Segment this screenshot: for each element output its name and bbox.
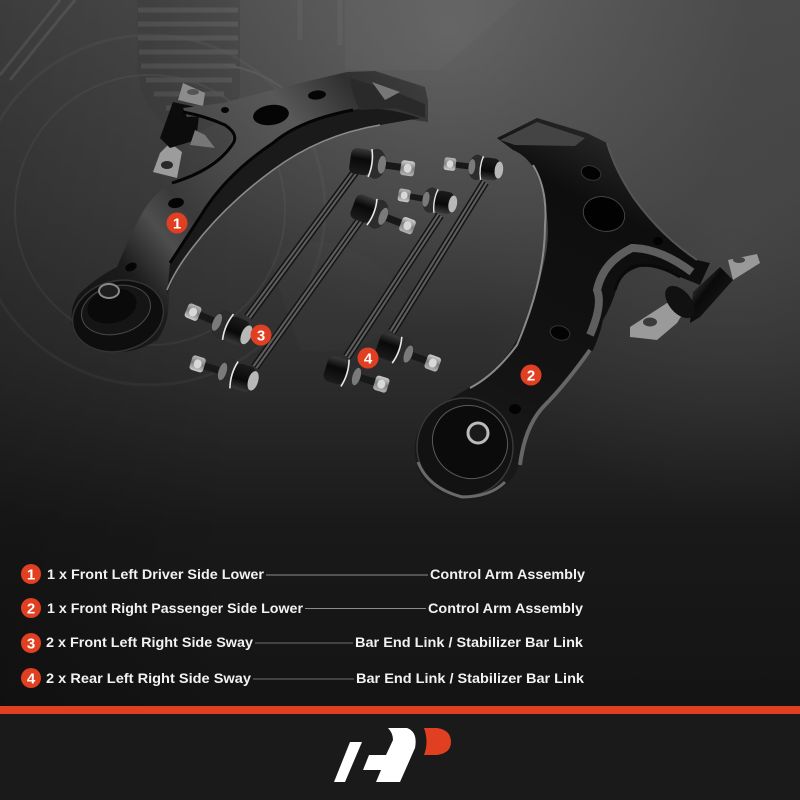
callout badge 1: [166, 212, 188, 234]
legend row 3: [21, 633, 583, 653]
legend: [21, 564, 585, 688]
callout badge 2: [520, 364, 542, 386]
callout badge 3: [250, 324, 272, 346]
legend row 4: [21, 668, 584, 688]
footer: [0, 706, 800, 800]
callout badge 1: 1: [173, 216, 181, 232]
sway bar end link 4a: [321, 182, 459, 401]
legend row 1: Control Arm Assembly: [430, 566, 585, 582]
bushing: arm 2 sleeve: [630, 254, 760, 340]
callout badge 3: 3: [257, 328, 265, 344]
legend row 4: 4: [27, 670, 36, 688]
red divider bar: [0, 706, 800, 714]
bushing bracket: [153, 83, 215, 178]
legend row 2: Control Arm Assembly: [428, 600, 583, 616]
legend row 3: 2 x Front Left Right Side Sway: [46, 634, 253, 650]
bushing: arm 2: [417, 392, 521, 497]
legend row 3: Bar End Link / Stabilizer Bar Link: [355, 634, 583, 650]
control arm 1: front left: [65, 71, 428, 361]
callout badge 2: 2: [527, 368, 535, 384]
sway bar end link 3a: [181, 145, 417, 351]
legend row 4: 2 x Rear Left Right Side Sway: [46, 670, 251, 686]
control arm 2: front right: [415, 118, 760, 500]
legend row 2: 2: [27, 600, 35, 618]
legend row 2: [21, 598, 583, 618]
legend row 1: [21, 564, 585, 584]
sway bar end links: rods: [245, 166, 488, 369]
ghost background: shock boot and wheel: [0, 0, 520, 385]
sway bar end link 4b: [373, 151, 505, 379]
bushing: arm 1: [65, 271, 171, 361]
legend row 1: 1: [27, 566, 35, 584]
logo: [334, 728, 451, 782]
callout badge 4: 4: [364, 350, 373, 368]
legend row 4: Bar End Link / Stabilizer Bar Link: [356, 670, 584, 686]
sway bar end link 3b: [187, 191, 419, 397]
legend row 3: 3: [27, 636, 35, 652]
legend row 2: 1 x Front Right Passenger Side Lower: [47, 600, 304, 616]
legend row 1: 1 x Front Left Driver Side Lower: [47, 566, 265, 582]
callout badge 4: [358, 348, 378, 368]
